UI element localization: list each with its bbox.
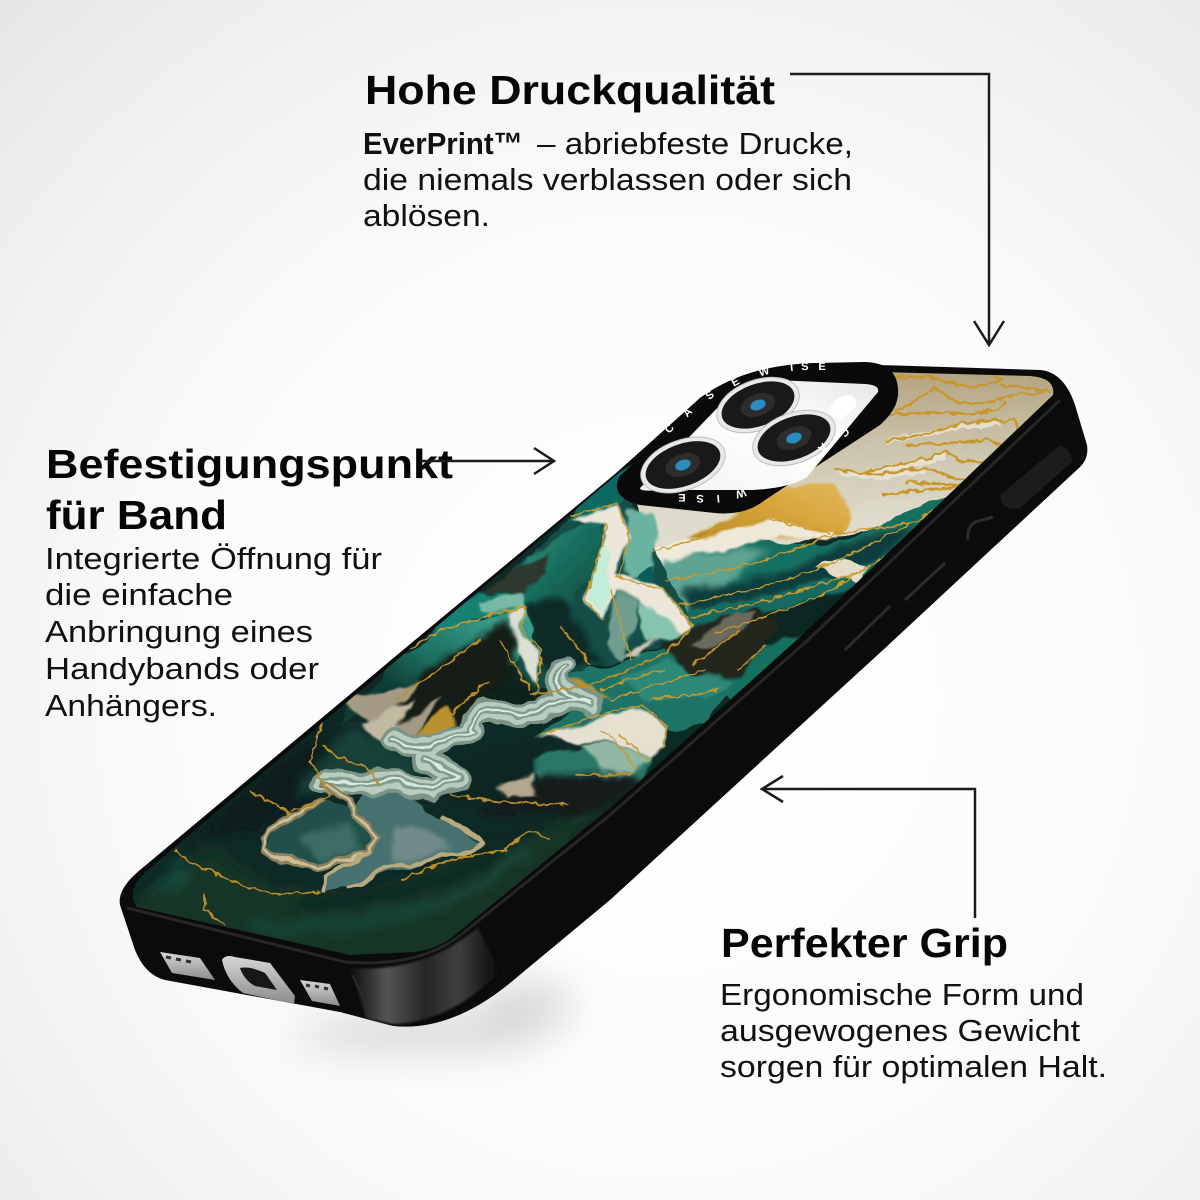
brand ring text: A [815,440,829,454]
body text: Ergonomische Form und [720,977,1084,1012]
lens 2 [745,400,843,476]
body text: – abriebfeste Drucke, [537,126,853,161]
shell rocks [345,638,660,800]
left teal ridge [340,608,535,725]
brand ring text: E [678,491,686,503]
brand ring text: S [704,389,717,403]
heading: Perfekter Grip [721,920,1008,966]
brand ring text: S [795,460,809,474]
brand ring text: W [734,486,747,500]
brand ring text: I [790,362,794,374]
sand sky [637,372,1054,550]
module ring [617,362,898,513]
body text: die einfache [45,577,233,612]
speaker right [300,980,340,1006]
hill veins [400,503,945,770]
back artwork [132,372,1054,955]
brand ring text: E [768,476,781,490]
body text [45,541,382,723]
body text: Integrierte Öffnung für [45,541,382,576]
brand ring text: C [663,422,677,436]
body text: ausgewogenes Gewicht [720,1013,1080,1048]
brand ring text: E [730,375,742,389]
arrow: top callout to case [790,74,1004,345]
brand ring text: I [716,492,720,504]
base dark green [132,502,870,906]
body text: Handybands oder [45,651,319,686]
brand ring text: E [818,361,826,373]
heading: Befestigungspunkt [46,441,453,487]
upper right teal hills [686,496,948,700]
brand ring text: S [801,361,809,373]
upper dark trees [482,550,548,592]
speaker left [160,952,215,980]
lens 3 [633,426,733,504]
heading [46,441,453,538]
lens 1 [709,367,807,443]
glass window [640,380,878,491]
corner highlight [350,928,500,1024]
brand ring text: W [758,365,771,379]
brand ring text [663,361,851,504]
right mid teal [535,650,733,738]
camera module [617,361,898,513]
brand ring text: A [681,406,695,420]
bottom swirl [120,720,620,970]
case body [120,363,1087,1027]
body text: ablösen. [363,198,490,233]
brand ring text: C [837,425,851,439]
sky veins with cream highlights [838,423,1000,478]
sun [682,482,851,545]
callout: Befestigungspunkt für Band [45,441,453,723]
body text: Anhängers. [45,688,217,723]
main teal mountains [490,490,695,695]
callout: Hohe Druckqualität [363,67,853,233]
inner bumper rim [127,400,1060,963]
body text [363,126,853,233]
body text [720,977,1107,1084]
callout: Perfekter Grip [720,920,1107,1084]
side buttons [845,445,1072,650]
brand ring text: S [696,492,704,504]
phone case [120,363,1087,1027]
river [260,665,590,890]
right trees [660,607,778,678]
body text: sorgen für optimalen Halt. [720,1049,1107,1084]
left trees [398,616,520,727]
ports [160,952,340,1006]
body text: EverPrint™ [363,126,523,161]
heading: für Band [46,492,227,538]
branches and lower veins [175,625,765,925]
heading: Hohe Druckqualität [365,67,775,113]
gold nuggets [413,704,459,736]
cream peak right [815,560,868,582]
white mountain lower right [532,748,653,784]
white ridge [570,503,693,637]
charging port [222,956,295,1004]
body text: Anbringung eines [45,614,313,649]
arrow: band attachment [421,448,554,474]
phone shadow [295,981,575,1050]
pools [266,799,371,865]
cream ridge under sun [648,518,837,566]
gold veins [175,372,1050,925]
body text: die niemals verblassen oder sich [363,162,852,197]
arrow: grip [762,776,975,918]
